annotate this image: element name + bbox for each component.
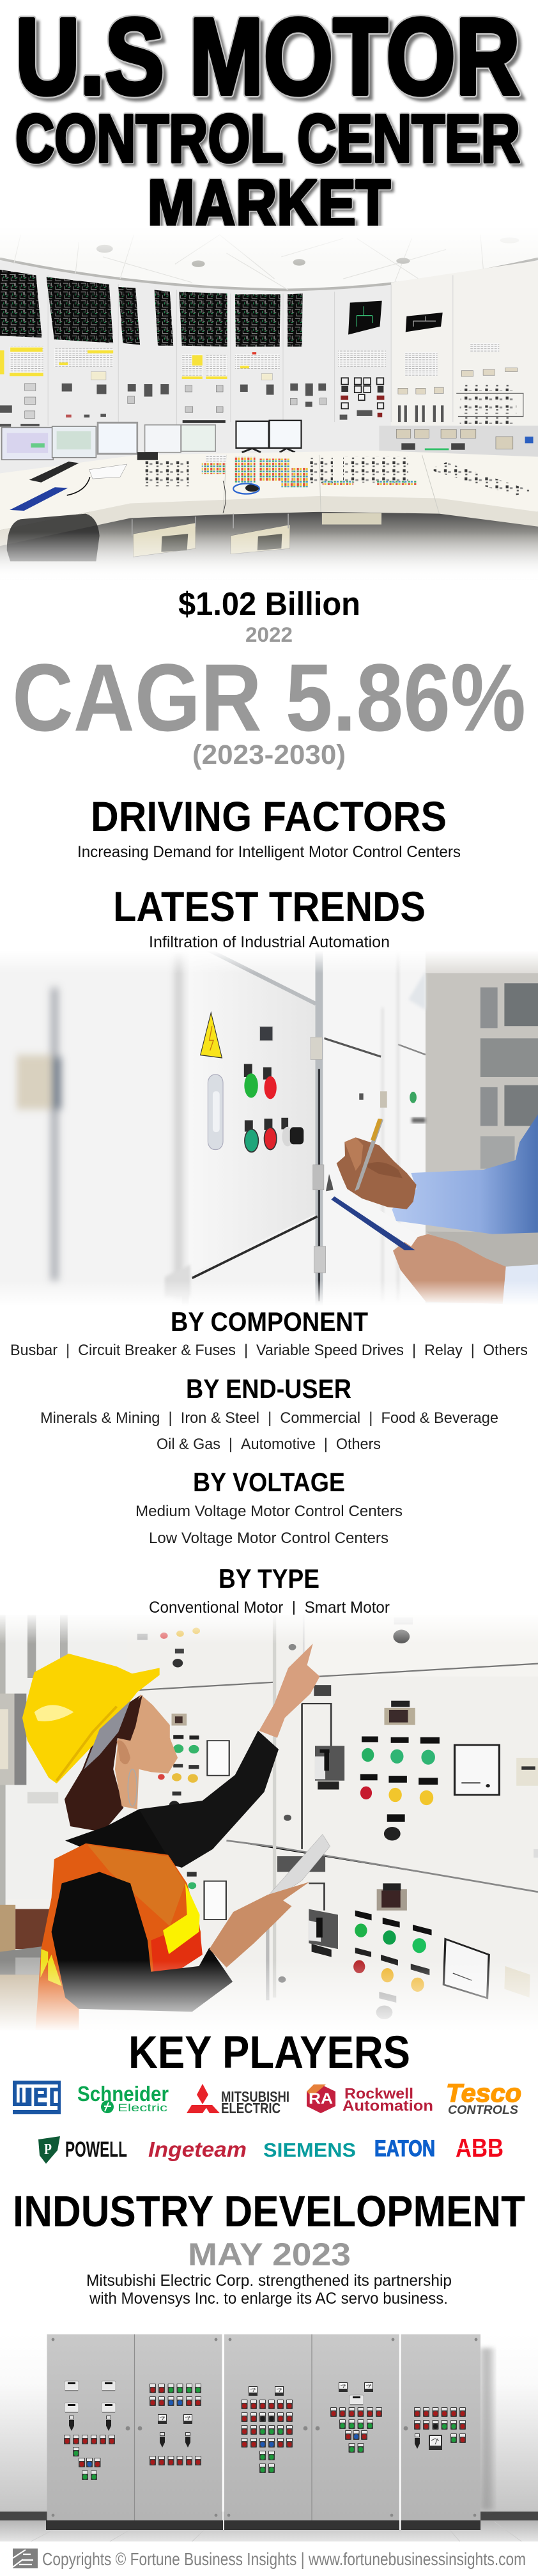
hair [65, 1695, 141, 1832]
logos row 1 [13, 2079, 521, 2117]
labels and yellow blocks [0, 343, 499, 380]
logo: Schneider Electric: Schneider [77, 2082, 169, 2106]
desk controls [10, 452, 535, 513]
tablet [268, 1835, 330, 1896]
heading: latest trends: LATEST TRENDS [113, 883, 426, 930]
logo: Powell: P [44, 2141, 52, 2158]
ceiling [0, 228, 538, 290]
heading: BY TYPE [219, 1563, 319, 1594]
photo: panel inspection with clipboard [0, 949, 538, 1310]
segment: by type [149, 1563, 390, 1617]
cabinets [139, 1621, 538, 2001]
floor [0, 512, 538, 576]
title [15, 0, 524, 244]
right panel upper controls [315, 1701, 538, 1858]
title line: MARKET: MARKET [148, 166, 390, 242]
footer [13, 2549, 526, 2569]
item medium: Medium Voltage Motor Control Centers [135, 1503, 403, 1520]
logo: WEG [13, 2081, 61, 2114]
blurred left cabinet [13, 958, 185, 1284]
footer logo [13, 2549, 38, 2568]
main door [280, 989, 316, 1230]
logo: Tesco Controls: Tesco [446, 2079, 521, 2107]
heading: BY COMPONENT [171, 1307, 368, 1337]
cabinet 5 controls [414, 2407, 466, 2450]
logo: Ingeteam: Ingeteam [148, 2138, 247, 2161]
hard hat [22, 1654, 160, 1783]
logo: Schneider Electric [77, 2082, 169, 2114]
cabinet 1 controls [64, 2381, 116, 2480]
right panel lower controls [309, 1883, 530, 2019]
wall instruments [0, 368, 523, 427]
logo: Powell: POWELL [65, 2138, 127, 2162]
fades [0, 950, 538, 970]
right wall with windows [426, 949, 538, 1303]
warning triangle [201, 1013, 222, 1058]
vest [35, 1843, 201, 2030]
worker figure [22, 1643, 330, 2030]
logo: ABB: ABB [456, 2133, 503, 2162]
cabinet 4 controls [330, 2382, 382, 2453]
fades [0, 1615, 538, 1642]
logos row 2 [38, 2133, 503, 2164]
base year: 2022 [245, 623, 293, 646]
mimic panels [0, 270, 443, 346]
logo: Rockwell Automation: Rockwell [344, 2085, 413, 2102]
development date: MAY 2023 [188, 2237, 351, 2272]
segment: by component [10, 1307, 528, 1359]
logo: Powell [38, 2136, 127, 2164]
cabinet doors [46, 2334, 480, 2530]
monitors [2, 421, 301, 460]
centre panel controls [158, 1714, 229, 1920]
logo: Tesco Controls: CONTROLS [448, 2104, 518, 2117]
development text: with Movensys Inc. to enlarge its AC servo business. [89, 2290, 448, 2308]
far cabinets [323, 949, 426, 1303]
logo: Schneider Electric: Electric [118, 2102, 168, 2114]
wall and floor [0, 2333, 538, 2541]
items row 1: Minerals & Mining | Iron & Steel | Commercial | Food & Beverage [40, 1409, 498, 1427]
door handle [208, 1075, 223, 1149]
title line: MARKET: MARKET [150, 169, 393, 244]
logo: Mitsubishi Electric: MITSUBISHI [221, 2088, 289, 2105]
cabinet 2 controls [150, 2384, 201, 2465]
heading: BY END-USER [186, 1374, 351, 1404]
logo: Siemens: SIEMENS [263, 2139, 356, 2161]
development text: Mitsubishi Electric Corp. strengthened its partnership [86, 2272, 452, 2290]
top and bottom fades [0, 226, 538, 264]
logo: Eaton: EATON [374, 2136, 435, 2161]
segment: by voltage [135, 1467, 403, 1547]
pilot buttons [244, 1064, 304, 1152]
photo: engineer with hard hat [0, 1612, 538, 2032]
forecast period: (2023-2030) [192, 740, 346, 770]
lower hand [210, 1882, 309, 1967]
background left [0, 1616, 68, 2024]
dark sleeve lower [52, 1872, 233, 2012]
photo: motor control cabinets [0, 2333, 538, 2541]
heading: BY VOLTAGE [193, 1467, 345, 1497]
heading: driving factors: DRIVING FACTORS [91, 793, 447, 840]
items row 2: Oil & Gas | Automotive | Others [157, 1436, 381, 1453]
logo: Mitsubishi Electric [187, 2084, 289, 2116]
yellow reflective [163, 1883, 200, 1954]
market size value: $1.02 Billion [178, 586, 360, 622]
face and neck [115, 1695, 178, 1809]
raised hand [259, 1643, 319, 1738]
logo: Rockwell Automation: Automation [342, 2097, 433, 2114]
segment: by end-user [40, 1374, 498, 1453]
sleeve raised [137, 1731, 279, 1868]
item low: Low Voltage Motor Control Centers [149, 1530, 388, 1547]
items: Busbar | Circuit Breaker & Fuses | Variable Speed Drives | Relay | Others [10, 1342, 528, 1359]
desk [0, 451, 538, 530]
photo: control room [0, 226, 538, 580]
chair and computers under desk [7, 514, 100, 561]
heading: key players: KEY PLAYERS [128, 2028, 410, 2078]
development text [86, 2272, 452, 2308]
title line: MARKET: MARKET [148, 166, 390, 242]
driving factor text: Increasing Demand for Intelligent Motor Control Centers [77, 843, 461, 861]
logo: Rockwell Automation [307, 2084, 433, 2114]
label plate [260, 1027, 273, 1041]
upper panel controls [137, 1617, 413, 1667]
cabinet 3 controls [242, 2386, 293, 2473]
logo: Rockwell Automation: RA [309, 2090, 333, 2107]
raised right console [379, 426, 538, 457]
hands, sleeve and clipboard [326, 1114, 538, 1304]
right wall highlight [391, 261, 538, 426]
body [65, 1809, 139, 1851]
logo: Mitsubishi Electric: ELECTRIC [221, 2100, 281, 2116]
items: Conventional Motor | Smart Motor [149, 1599, 390, 1617]
latest trend text: Infiltration of Industrial Automation [149, 933, 390, 951]
